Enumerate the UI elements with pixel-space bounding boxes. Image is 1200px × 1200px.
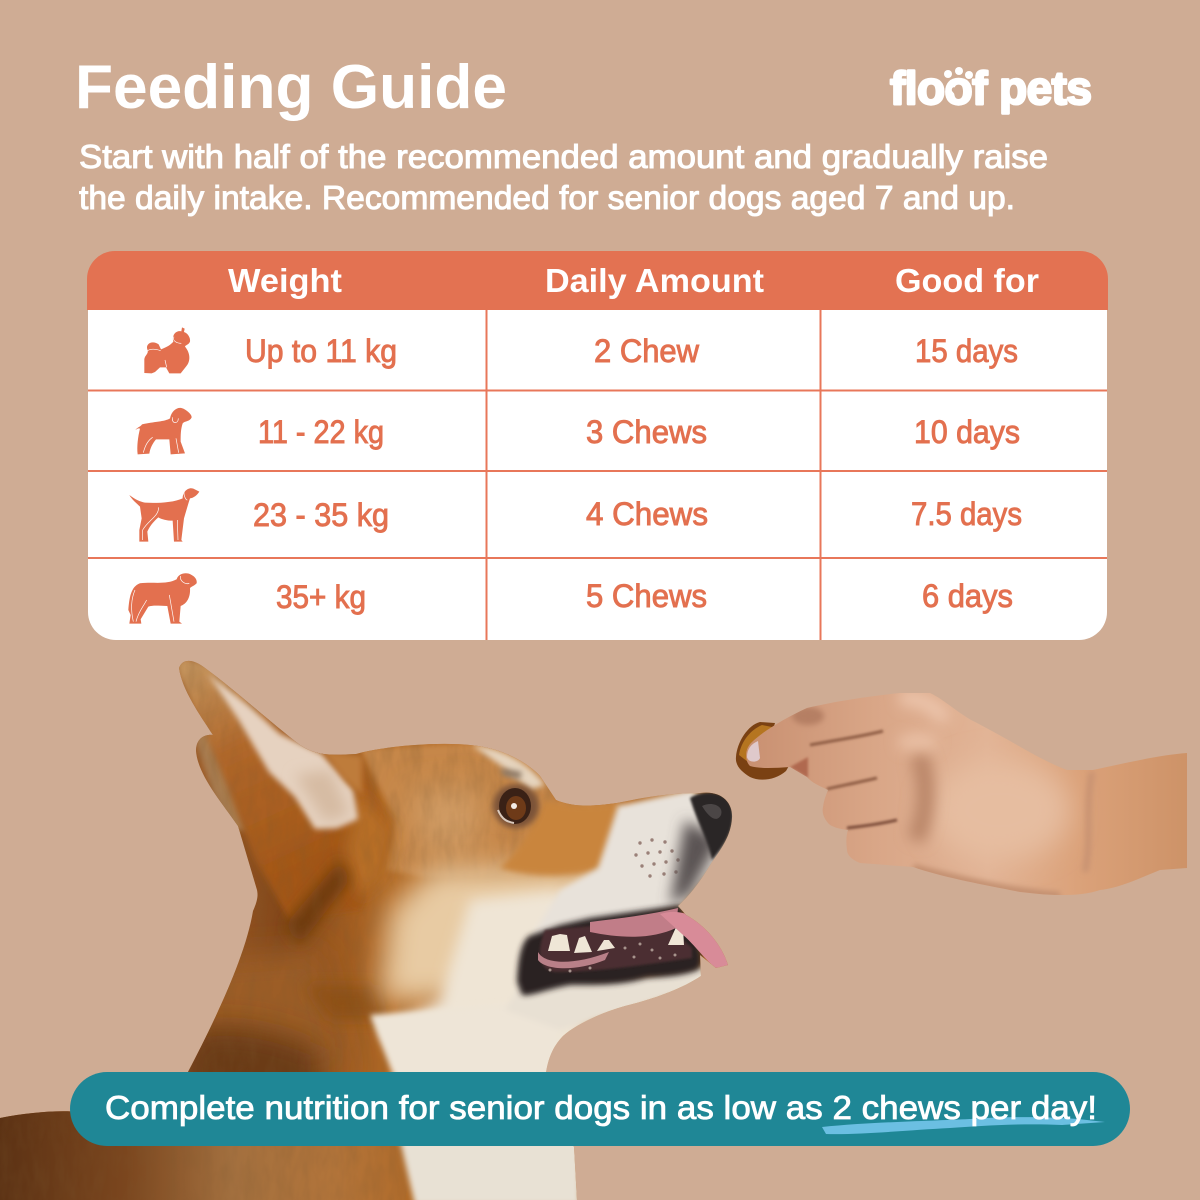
brush underline: [822, 1117, 1105, 1134]
callout banner: [70, 1072, 1130, 1146]
row: 11 - 22 kg: [135, 408, 1020, 454]
nose: [670, 792, 733, 905]
table header: Daily Amount: [545, 262, 764, 299]
row: 23 - 35 kg: [129, 488, 1022, 542]
hand: [740, 685, 1190, 900]
table header: Weight: [228, 262, 342, 299]
ear outer: [179, 661, 364, 918]
row: 23 - 35 kg: 4 Chews: [586, 496, 708, 532]
fur texture: [0, 745, 420, 1200]
feeding table: [87, 251, 1108, 640]
cream chest below banner: [400, 1140, 580, 1200]
head fur: [360, 740, 625, 878]
banner text: Complete nutrition for senior dogs in as low as 2 chews per day!: [105, 1090, 1097, 1127]
eye: [493, 784, 539, 828]
table body panel: [88, 270, 1107, 640]
icon: medium dog: [135, 408, 192, 454]
icon: large dog: [128, 573, 197, 624]
row: 35+ kg: [128, 573, 1013, 624]
tongue: [660, 912, 728, 968]
row: 35+ kg: 6 days: [922, 578, 1013, 614]
title: Feeding Guide: [75, 53, 507, 122]
cream cheek and neck: [380, 866, 610, 1000]
brow patch: [472, 745, 545, 790]
neck left fur: [188, 948, 324, 1072]
neck shadows: [285, 860, 350, 945]
lower jaw: [574, 963, 701, 1028]
chew: [736, 722, 790, 780]
row: 35+ kg: 35+ kg: [276, 579, 366, 615]
row: up to 11 kg: 2 Chew: [594, 333, 700, 369]
table header: Good for: [895, 262, 1039, 299]
row: up to 11 kg: [144, 327, 1018, 373]
intro text: the daily intake. Recommended for senior dogs aged 7 and up.: [79, 179, 1015, 216]
row: up to 11 kg: Up to 11 kg: [245, 333, 397, 369]
row: up to 11 kg: 15 days: [915, 333, 1018, 369]
row: 35+ kg: 5 Chews: [586, 578, 707, 614]
row: 11 - 22 kg: 11 - 22 kg: [258, 414, 384, 450]
row: 11 - 22 kg: 3 Chews: [586, 414, 707, 450]
mouth: [517, 905, 702, 995]
ear inner: [208, 674, 358, 829]
photo: corgi in profile: [0, 650, 760, 1200]
table header: [87, 251, 1108, 310]
intro text: [79, 138, 1048, 216]
white muzzle: [555, 793, 732, 924]
row: 11 - 22 kg: 10 days: [914, 414, 1020, 450]
icon: tall dog: [129, 488, 199, 542]
row: 23 - 35 kg: 7.5 days: [911, 496, 1022, 532]
back ear: [196, 735, 245, 832]
icon: small fluffy dog: [144, 327, 190, 373]
intro text: Start with half of the recommended amount and gradually raise: [79, 138, 1048, 175]
logo: floof pets: floof pets: [890, 62, 1093, 114]
row: 23 - 35 kg: 23 - 35 kg: [253, 497, 389, 533]
fingernail: [747, 741, 760, 762]
photo: hand with chew: [736, 685, 1190, 900]
orange snout patch: [500, 800, 618, 875]
